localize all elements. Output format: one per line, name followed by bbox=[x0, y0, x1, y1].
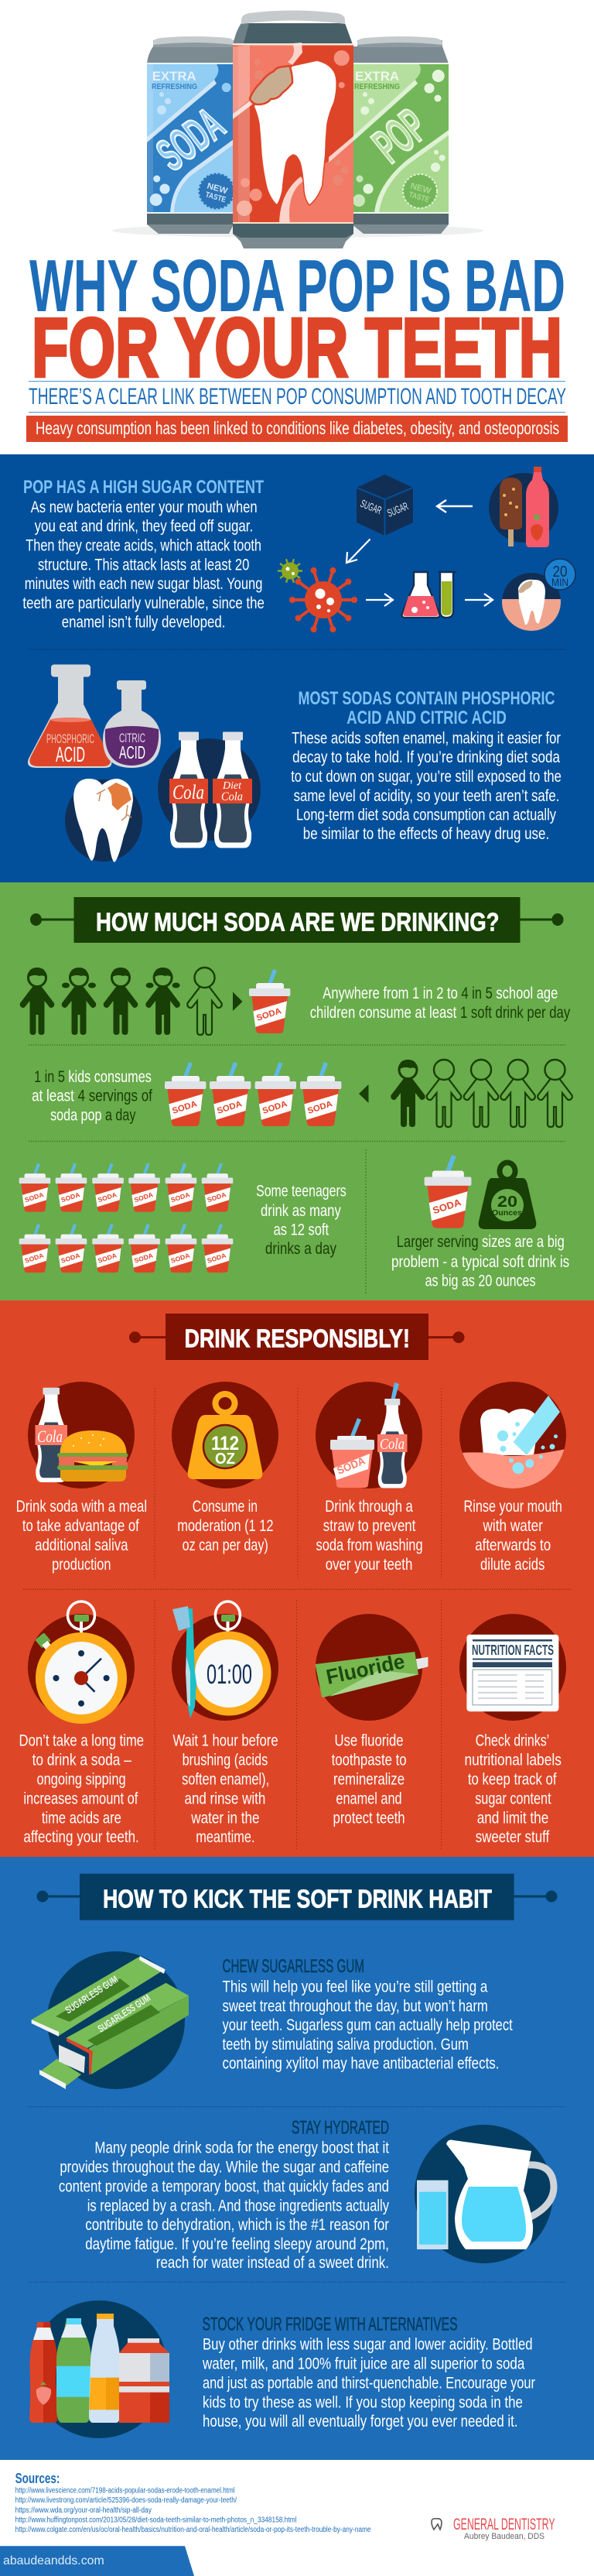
heading: how much soda: HOW MUCH SODA ARE WE DRINKING? bbox=[96, 908, 500, 937]
text: wait one hour bbox=[172, 1732, 278, 1846]
text: stock your fridge: house, you will all eventually forget you ever needed it. bbox=[203, 2413, 518, 2430]
icon: toothbrush and timer: 01:00 bbox=[207, 1660, 252, 1690]
heading: drink responsibly bbox=[129, 1314, 464, 1360]
text: chew sugarless gum: This will help you feel like you’re still getting a bbox=[223, 1978, 488, 1995]
text: nutrition labels: sugar content bbox=[475, 1790, 551, 1808]
text: rinse: Rinse your mouth bbox=[464, 1498, 562, 1516]
text: teenagers bbox=[256, 1183, 346, 1258]
icon: phosphoric acid flask: PHOSPHORIC bbox=[46, 731, 94, 746]
icon: green pop can: TASTE bbox=[408, 190, 430, 204]
text: chew sugarless gum: your teeth. Sugarless gum can actually help protect bbox=[223, 2016, 513, 2034]
heading: sources: Sources: bbox=[15, 2471, 60, 2486]
icon: citric acid flask: CITRIC bbox=[119, 731, 145, 745]
text: nutrition labels: to keep track of bbox=[468, 1771, 557, 1789]
text: fluoride: protect teeth bbox=[333, 1810, 405, 1828]
text: chew sugarless gum bbox=[223, 1956, 513, 2072]
text: moderation: moderation (1 12 bbox=[177, 1517, 274, 1535]
can text: EXTRA bbox=[152, 69, 196, 84]
badge: 20 min: MIN bbox=[551, 576, 568, 588]
icon: 12 oz weight bbox=[172, 1382, 278, 1488]
heading: how much soda bbox=[30, 897, 563, 943]
icon: blue soda can: NEW bbox=[206, 181, 229, 197]
text: fluoride: enamel and bbox=[336, 1790, 402, 1808]
icon: citric acid flask: ACID bbox=[119, 742, 145, 762]
text: larger serving sizes: Larger serving sizes are a big bbox=[397, 1233, 565, 1251]
icon: nutrition facts label bbox=[459, 1614, 566, 1721]
text: wait one hour: soften enamel), bbox=[182, 1771, 269, 1789]
icon: soda cup bbox=[249, 969, 290, 1033]
icon: twelve soda cups bbox=[19, 1163, 233, 1273]
text: 1 in 2 to 4 in 5: Anywhere from 1 in 2 to 4 in 5 school age bbox=[323, 985, 558, 1002]
icon: sugarless gum: SUGARLESS GUM bbox=[95, 1992, 152, 2035]
icon: blue soda can: TASTE bbox=[204, 190, 227, 204]
panel: how much soda bbox=[0, 882, 594, 1300]
panel: drink responsibly bbox=[0, 1300, 594, 1857]
text: wait one hour: brushing (acids bbox=[183, 1752, 268, 1769]
text: sugar explanation: you eat and drink, they feed off sugar. bbox=[35, 518, 253, 536]
icon: 20 ounce weight: Ounces bbox=[492, 1209, 522, 1218]
tab: website bbox=[0, 2546, 194, 2576]
sources: http://www.huffingtonpost.com/2013/05/28/diet-soda-teeth-similar-to-meth-photos_n_3348158.html bbox=[15, 2516, 297, 2525]
icon: soda cup: SODA bbox=[255, 1006, 282, 1023]
icon: cracked tooth bbox=[65, 779, 142, 862]
tab: website: abaudeandds.com bbox=[3, 2554, 104, 2567]
text: stay hydrated: daytime fatigue. If you’re feeling sleepy around 2pm, bbox=[85, 2235, 389, 2253]
icon: sugar cube bbox=[357, 474, 413, 536]
text: larger serving sizes: as big as 20 ounces bbox=[425, 1272, 536, 1290]
text: long time bbox=[19, 1732, 144, 1846]
icon: green pop can: REFRESHING bbox=[354, 83, 400, 91]
text: 1 in 5 kids: at least 4 servings of bbox=[32, 1087, 152, 1105]
heading: phosphoric and citric acid bbox=[299, 688, 555, 728]
icon: twelve soda cups: SODA bbox=[24, 1252, 45, 1265]
text: drink with a meal: to take advantage of bbox=[22, 1517, 139, 1535]
icon: cup and bottle with straws bbox=[316, 1382, 422, 1488]
text: drink with a meal bbox=[16, 1498, 147, 1574]
icon: green pop can: NEW bbox=[409, 181, 432, 197]
text: drink with a meal: additional saliva bbox=[35, 1536, 128, 1554]
arrow: left triangle bbox=[359, 1084, 368, 1103]
text: chew sugarless gum: sweet treat throughout the day, but won’t harm bbox=[223, 1997, 488, 2015]
text: sugar explanation bbox=[22, 498, 265, 632]
icon: four soda cups: SODA bbox=[261, 1099, 288, 1116]
text: 1 in 5 kids bbox=[32, 1068, 152, 1124]
text: nutrition labels: and limit the bbox=[477, 1810, 548, 1828]
panel: acid and sugar bbox=[0, 454, 594, 882]
text: stock your fridge: water, milk, and 100% fruit juice are all superior to soda bbox=[202, 2355, 525, 2373]
icon: four soda cups bbox=[165, 1062, 341, 1126]
panel: kick the habit bbox=[0, 1857, 594, 2460]
tooth bbox=[254, 60, 336, 205]
icon: phosphoric acid flask: ACID bbox=[56, 742, 85, 766]
heading: stock your fridge: STOCK YOUR FRIDGE WITH ALTERNATIVES bbox=[203, 2314, 458, 2335]
text: straw: soda from washing bbox=[316, 1536, 423, 1554]
icon: citric acid flask bbox=[103, 680, 161, 768]
text: straw: straw to prevent bbox=[323, 1517, 415, 1535]
icon: blue soda can: SODA bbox=[148, 98, 234, 180]
icon: twelve soda cups: SODA bbox=[24, 1190, 45, 1204]
header background bbox=[0, 0, 594, 454]
text: nutrition labels bbox=[464, 1732, 562, 1846]
text: wait one hour: and rinse with bbox=[184, 1790, 265, 1808]
icon: decaying tooth bbox=[502, 573, 561, 631]
text: nutrition labels: Check drinks’ bbox=[476, 1732, 549, 1750]
heading: kick the habit: HOW TO KICK THE SOFT DRINK HABIT bbox=[103, 1884, 492, 1913]
logo: general dentistry: Aubrey Baudean, DDS bbox=[464, 2532, 544, 2541]
heading: phosphoric and citric acid: ACID AND CITRIC ACID bbox=[346, 707, 507, 728]
sources: http://www.livescience.com/7198-acids-popular-sodas-erode-tooth-enamel.html bbox=[15, 2487, 235, 2496]
text: drink with a meal: Drink soda with a meal bbox=[16, 1498, 147, 1516]
text: rinse bbox=[464, 1498, 562, 1574]
text: sugar explanation: structure. This attack lasts at least 20 bbox=[38, 556, 249, 574]
icon: 20 ounce weight: 20 bbox=[497, 1194, 517, 1211]
text: wait one hour: water in the bbox=[190, 1810, 260, 1828]
heading: high sugar content: POP HAS A HIGH SUGAR CONTENT bbox=[23, 477, 264, 498]
heading: chew sugarless gum: CHEW SUGARLESS GUM bbox=[223, 1956, 364, 1977]
text: stay hydrated: content provide a temporary boost, that quickly fades and bbox=[59, 2178, 389, 2196]
text: fluoride: toothpaste to bbox=[332, 1752, 407, 1769]
icon: 12 oz weight: 112 bbox=[211, 1433, 239, 1454]
icon: 12 oz weight: OZ bbox=[215, 1451, 235, 1468]
heading: drink responsibly: DRINK RESPONSIBLY! bbox=[184, 1324, 410, 1353]
text: long time: time acids are bbox=[42, 1810, 121, 1828]
icon: sugar cube: SUGAR bbox=[359, 497, 384, 516]
icon: cola bottles: Cola bbox=[221, 790, 243, 803]
icon: toothbrush and timer bbox=[172, 1601, 278, 1721]
icon: four soda cups: SODA bbox=[306, 1099, 333, 1116]
logo: general dentistry bbox=[432, 2516, 555, 2541]
icon: cup and bottle with straws: SODA bbox=[335, 1454, 367, 1477]
text: long time: Don’t take a long time bbox=[19, 1732, 144, 1750]
icon: stopwatch bbox=[28, 1601, 135, 1724]
icon: phosphoric acid flask bbox=[28, 664, 111, 768]
can shadow bbox=[112, 224, 483, 238]
text: stay hydrated: is replaced by a crash. And those ingredients actually bbox=[87, 2197, 389, 2215]
sources: http://www.livestrong.com/article/525396-does-soda-really-damage-your-teeth/ bbox=[15, 2496, 237, 2505]
sources: http://www.colgate.com/en/us/oc/oral-health/basics/nutrition-and-oral-health/article/soda-or-pop-its-teeth-trouble-by-any-name bbox=[15, 2526, 371, 2534]
text: stay hydrated: contribute to dehydration, which is the #1 reason for bbox=[85, 2216, 389, 2234]
icon: rinsing tooth bbox=[459, 1382, 566, 1490]
text: stock your fridge: kids to try these as well. If you stop keeping soda in the bbox=[203, 2393, 523, 2411]
can text: EXTRA bbox=[355, 69, 399, 84]
text: larger serving sizes bbox=[391, 1233, 569, 1290]
text: straw: Drink through a bbox=[325, 1498, 413, 1516]
icon: blue soda can bbox=[147, 36, 234, 234]
icon: water jug and glass bbox=[415, 2125, 554, 2263]
text: stay hydrated: reach for water instead of a sweet drink. bbox=[156, 2254, 389, 2272]
text: long time: ongoing sipping bbox=[37, 1771, 126, 1789]
text: rinse: with water bbox=[483, 1517, 543, 1535]
text: long time: to drink a soda – bbox=[32, 1752, 131, 1769]
icon: small bacteria bbox=[278, 559, 302, 583]
text: nutrition labels: sweeter stuff bbox=[476, 1828, 549, 1846]
badge: 20 min: 20 bbox=[552, 564, 568, 581]
icon: sugar cube: SUGAR bbox=[385, 499, 410, 519]
icon: fluoride toothpaste bbox=[316, 1614, 428, 1721]
icon: twelve soda cups: SODA bbox=[60, 1252, 81, 1265]
text: 1 in 5 kids: soda pop a day bbox=[50, 1107, 136, 1124]
text: nutrition labels: nutritional labels bbox=[464, 1752, 562, 1769]
icon: twelve soda cups: SODA bbox=[207, 1190, 227, 1204]
text: moderation: Consume in bbox=[193, 1498, 258, 1516]
text: stay hydrated: provides throughout the day. While the sugar and caffeine bbox=[60, 2159, 389, 2177]
sources: https://www.wda.org/your-oral-health/sip-all-day bbox=[15, 2506, 152, 2515]
text: rinse: afterwards to bbox=[475, 1536, 551, 1554]
text: sugar explanation: minutes with each new sugar blast. Young bbox=[25, 575, 262, 593]
arrow: sugar to bacteria bbox=[346, 539, 370, 563]
icon: green pop can bbox=[352, 36, 449, 234]
icon: alternative drinks bbox=[29, 2300, 169, 2438]
text: drink with a meal: production bbox=[52, 1556, 111, 1574]
text: moderation: oz can per day) bbox=[183, 1536, 268, 1554]
text: teenagers: as 12 soft bbox=[274, 1221, 329, 1238]
icon: blue soda can: REFRESHING bbox=[152, 83, 197, 91]
text: sugar explanation: teeth are particularly vulnerable, since the bbox=[22, 594, 265, 612]
text: 1 in 2 to 4 in 5: children consume at least 1 soft drink per day bbox=[310, 1004, 571, 1022]
icon: cola bottles: Diet bbox=[222, 780, 242, 792]
text: 1 in 5 kids: 1 in 5 kids consumes bbox=[34, 1068, 152, 1086]
icon: cup and bottle with straws: Cola bbox=[380, 1436, 405, 1453]
text: rinse: dilute acids bbox=[480, 1556, 544, 1574]
icon: green pop can: POP bbox=[362, 98, 437, 173]
icon: one in five children bbox=[391, 1060, 572, 1127]
icon: cola and burger: Cola bbox=[37, 1427, 63, 1446]
icon: twelve soda cups: SODA bbox=[97, 1252, 118, 1265]
arrow: acid to tooth bbox=[465, 594, 493, 606]
text: moderation bbox=[177, 1498, 274, 1554]
text: long time: increases amount of bbox=[23, 1790, 138, 1808]
text: sugar explanation: enamel isn’t fully developed. bbox=[62, 613, 225, 632]
heading: stay hydrated: STAY HYDRATED bbox=[292, 2118, 389, 2139]
text: wait one hour: Wait 1 hour before bbox=[172, 1732, 278, 1750]
icon: four soda cups: SODA bbox=[216, 1099, 243, 1116]
sources bbox=[15, 2471, 371, 2534]
icon: lab flask and tube bbox=[402, 572, 455, 618]
icon: cola and burger bbox=[28, 1382, 135, 1488]
text: fluoride: Use fluoride bbox=[334, 1732, 404, 1750]
icon: cola bottles: Cola bbox=[172, 781, 204, 803]
text: stay hydrated: Many people drink soda for the energy boost that it bbox=[94, 2139, 389, 2157]
icon: nutrition facts label: NUTRITION FACTS bbox=[472, 1643, 554, 1658]
badge: 20 min bbox=[544, 559, 575, 590]
text: acid explanation bbox=[291, 729, 562, 843]
text: teenagers: drink as many bbox=[261, 1202, 341, 1220]
text: straw bbox=[316, 1498, 423, 1574]
icon: red bacteria bbox=[289, 567, 357, 632]
text: fluoride: remineralize bbox=[333, 1771, 405, 1789]
text: sugar explanation: As new bacteria enter your mouth when bbox=[31, 498, 258, 516]
text: chew sugarless gum: teeth by stimulating saliva production. Gum bbox=[223, 2036, 469, 2054]
text: stay hydrated bbox=[59, 2118, 389, 2272]
icon: popsicle and bottle bbox=[489, 467, 558, 547]
arrow: bacteria to acid bbox=[366, 594, 393, 606]
text: chew sugarless gum: containing xylitol may have antibacterial effects. bbox=[223, 2054, 500, 2072]
icon: 20 ounce weight bbox=[479, 1163, 536, 1229]
icon: twelve soda cups: SODA bbox=[170, 1252, 191, 1265]
icon: four in five children bbox=[20, 968, 222, 1035]
icon: fluoride toothpaste: Fluoride bbox=[324, 1649, 407, 1689]
icon: large soda cup: SODA bbox=[432, 1197, 463, 1216]
icon: sugarless gum bbox=[32, 1951, 189, 2089]
icon: twelve soda cups: SODA bbox=[133, 1252, 154, 1265]
arrow: right triangle bbox=[233, 992, 243, 1011]
text: long time: affecting your teeth. bbox=[23, 1828, 139, 1846]
icon: twelve soda cups: SODA bbox=[170, 1190, 191, 1204]
icon: sugarless gum: SUGARLESS GUM bbox=[63, 1973, 120, 2016]
icon: cola bottles bbox=[158, 732, 261, 848]
text: sugar explanation: Then they create acids, which attack tooth bbox=[26, 537, 261, 554]
arrow: bottle to sugar bbox=[437, 500, 473, 512]
heading: kick the habit bbox=[37, 1874, 557, 1920]
icon: twelve soda cups: SODA bbox=[60, 1190, 81, 1204]
text: fluoride bbox=[332, 1732, 407, 1828]
icon: twelve soda cups: SODA bbox=[133, 1190, 154, 1204]
text: 1 in 2 to 4 in 5 bbox=[310, 985, 571, 1022]
text: wait one hour: meantime. bbox=[196, 1828, 255, 1846]
title bbox=[29, 245, 565, 394]
icon: large soda cup bbox=[425, 1155, 471, 1228]
text: teenagers: drinks a day bbox=[265, 1240, 336, 1258]
text: teenagers: Some teenagers bbox=[256, 1183, 346, 1201]
text: straw: over your teeth bbox=[326, 1556, 412, 1574]
icon: twelve soda cups: SODA bbox=[97, 1190, 118, 1204]
icon: twelve soda cups: SODA bbox=[207, 1252, 227, 1265]
icon: red can with tooth bbox=[233, 11, 353, 248]
text: stock your fridge bbox=[202, 2314, 535, 2430]
icon: four soda cups: SODA bbox=[171, 1099, 198, 1116]
